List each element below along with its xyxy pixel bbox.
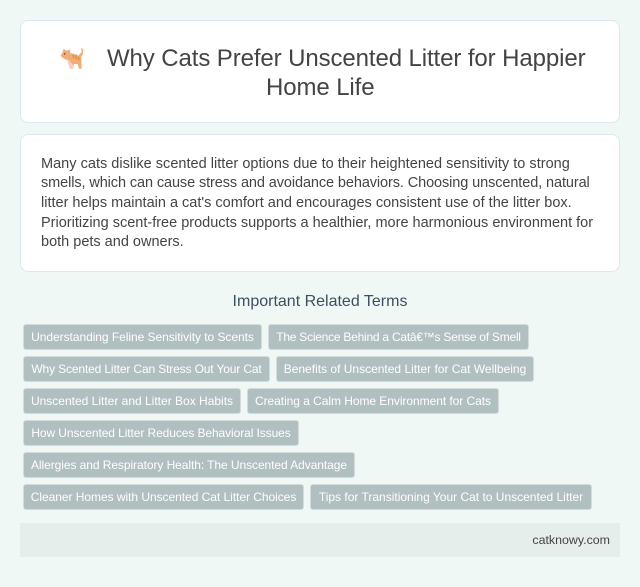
- tag: [23, 388, 241, 414]
- description card: [20, 134, 620, 272]
- related terms heading: Important Related Terms: [233, 293, 407, 310]
- tag: [23, 356, 270, 382]
- tag: Benefits of Unscented Litter for Cat Wellbeing: [284, 362, 526, 376]
- title: Home Life: [266, 74, 374, 101]
- description text: Many cats dislike scented litter options due to their heightened sensitivity to strong: [41, 156, 570, 172]
- tag: [268, 324, 529, 350]
- tag: [23, 420, 299, 446]
- title: Why Cats Prefer Unscented Litter for Happier: [107, 45, 585, 72]
- tag: [247, 388, 499, 414]
- source: catknowy.com: [532, 533, 610, 547]
- description text: both pets and owners.: [41, 234, 184, 250]
- tag: [310, 484, 592, 510]
- tag: Understanding Feline Sensitivity to Scents: [31, 330, 254, 344]
- tag: Cleaner Homes with Unscented Cat Litter Choices: [31, 490, 296, 504]
- title: [107, 45, 586, 101]
- title card: [20, 20, 620, 123]
- tag: [276, 356, 534, 382]
- related terms tags: [23, 324, 592, 510]
- tag: How Unscented Litter Reduces Behavioral Issues: [31, 426, 291, 440]
- description text: [41, 156, 593, 250]
- tag: Allergies and Respiratory Health: The Unscented Advantage: [31, 458, 347, 472]
- tag: The Science Behind a Catâ€™s Sense of Smell: [276, 330, 521, 344]
- description text: Prioritizing scent-free products supports a healthier, more harmonious environment for: [41, 215, 593, 231]
- footer: [20, 523, 620, 557]
- tag: Why Scented Litter Can Stress Out Your Cat: [31, 362, 262, 376]
- tag: Unscented Litter and Litter Box Habits: [31, 394, 233, 408]
- description text: smells, which can cause stress and avoidance behaviors. Choosing unscented, natural: [41, 175, 590, 191]
- tag: Tips for Transitioning Your Cat to Unscented Litter: [319, 490, 583, 504]
- tag: [23, 324, 262, 350]
- tag: Creating a Calm Home Environment for Cats: [255, 394, 491, 408]
- tag: [23, 484, 304, 510]
- tag: [23, 452, 355, 478]
- icon: cat: [60, 48, 84, 69]
- description text: litter helps maintain a cat's comfort and encourages consistent use of the litter box.: [41, 195, 572, 211]
